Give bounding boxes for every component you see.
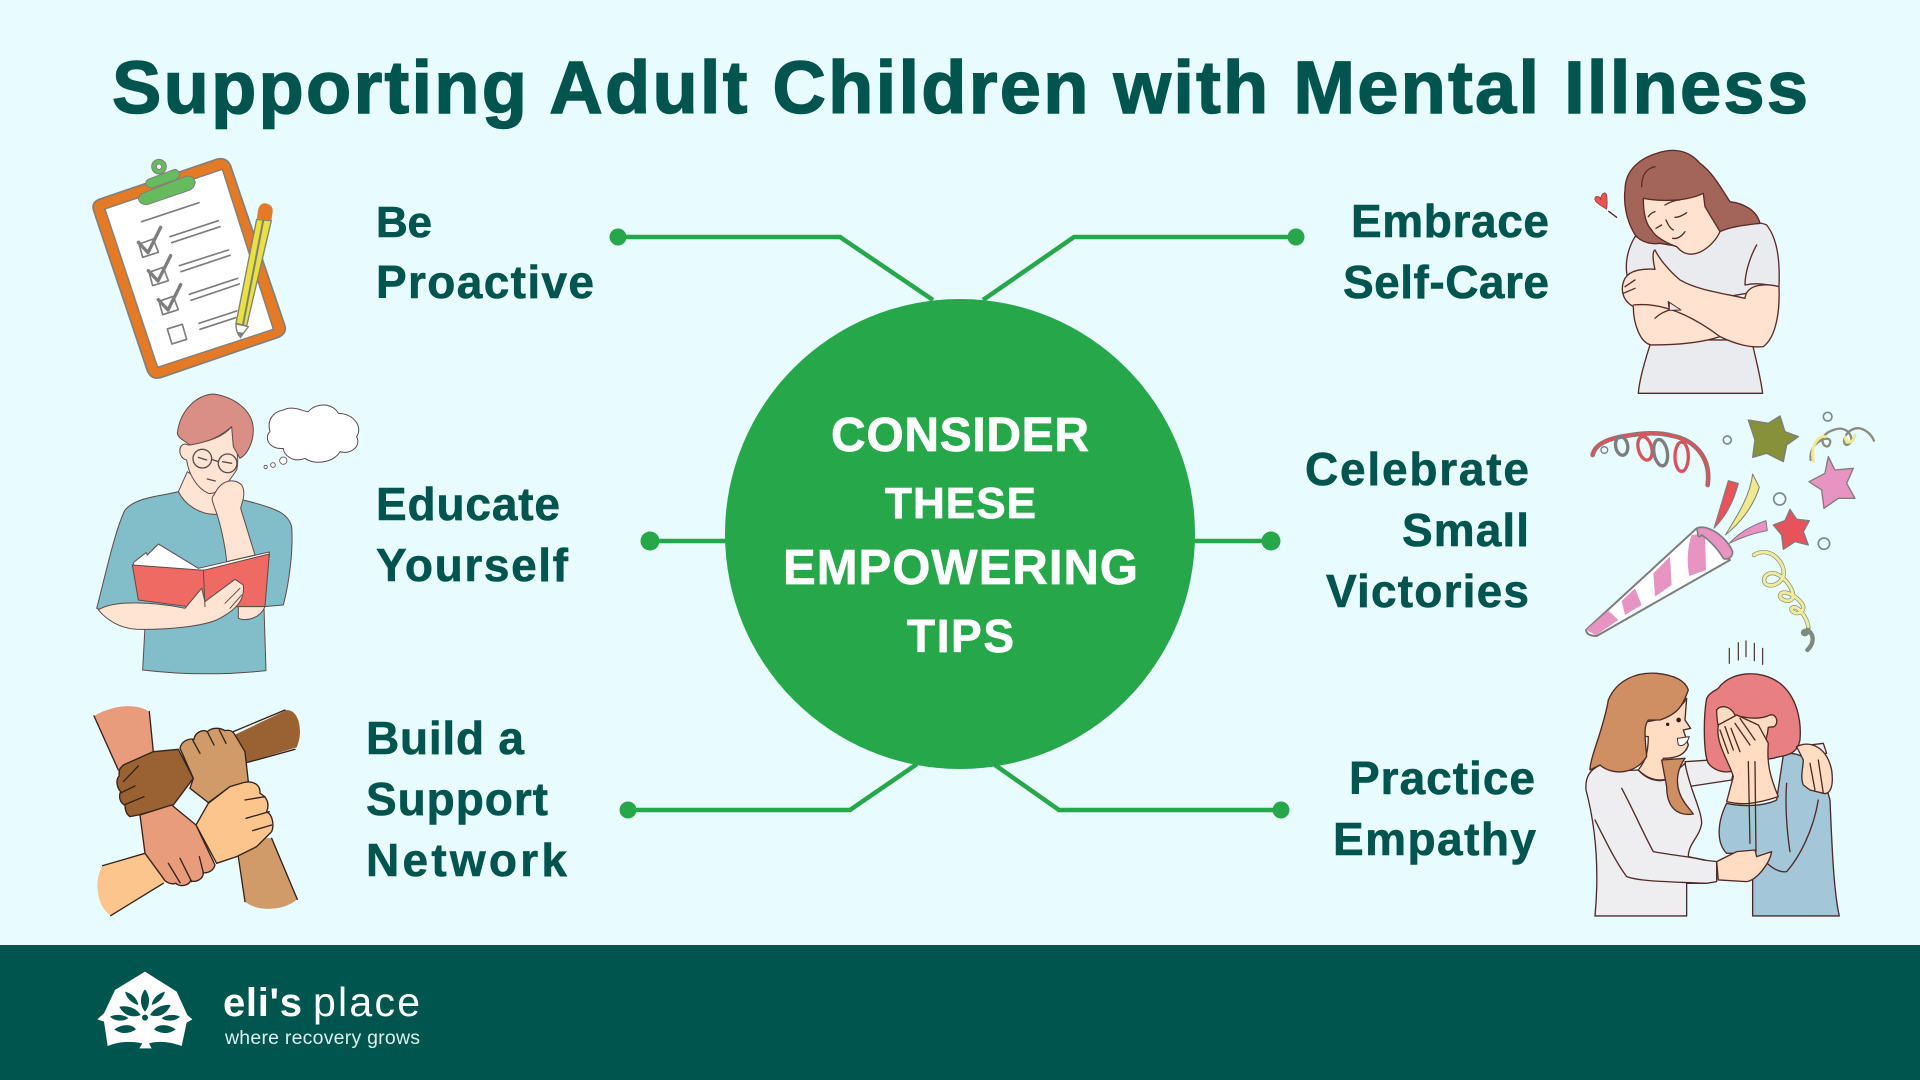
tagline: where recovery grows [224, 1027, 420, 1049]
central circle: TIPS [907, 610, 1014, 662]
tip: Celebrate Small Victories: Celebrate [1305, 443, 1529, 495]
icon: party popper with streamers and stars [1586, 412, 1874, 650]
hands over face [1718, 715, 1778, 804]
central circle: CONSIDER [831, 409, 1089, 462]
tip: Be Proactive [376, 198, 594, 308]
tan hand [180, 728, 248, 803]
tip: Embrace Self-Care [1343, 195, 1549, 308]
tip: Embrace Self-Care: Self-Care [1343, 256, 1549, 308]
arms crossed [1622, 250, 1779, 347]
book pages [133, 544, 269, 573]
red star [1773, 509, 1809, 549]
shirt upper [1626, 223, 1779, 307]
tip: Celebrate Small Victories [1305, 443, 1529, 617]
central circle: EMPOWERING [783, 541, 1138, 595]
tip: Build a Support Network: Support [366, 773, 548, 825]
pale hand [196, 782, 273, 863]
thought bubble [267, 405, 359, 462]
face [1643, 193, 1720, 254]
wordmark: eli's [223, 981, 302, 1025]
icon: woman comforting crying friend [1586, 641, 1839, 916]
shirt lower [1638, 340, 1763, 393]
crying woman face [1717, 707, 1777, 762]
dark brown hand [117, 749, 193, 817]
heart [1595, 193, 1607, 209]
tip: Educate Yourself [376, 478, 569, 591]
hair [1625, 150, 1760, 247]
central circle: THESE [885, 479, 1036, 528]
tip: Build a Support Network [366, 712, 567, 886]
friend features [1676, 718, 1681, 722]
tip: Practice Empathy: Practice [1349, 752, 1535, 804]
tip: Practice Empathy: Empathy [1333, 813, 1536, 865]
tip: Practice Empathy [1333, 752, 1536, 865]
icon: four linked hands [94, 706, 300, 916]
distress marks [1729, 641, 1763, 664]
salmon hand [140, 805, 215, 886]
icon: man reading a book and thinking [97, 394, 359, 674]
title: Supporting Adult Children with Mental Illness [112, 46, 1808, 129]
tip: Celebrate Small Victories: Small [1402, 504, 1529, 556]
neck [178, 472, 223, 514]
friend hand on shoulder [1797, 744, 1832, 794]
raised arm [212, 481, 255, 562]
friend hair [1590, 673, 1688, 772]
tip: Build a Support Network: Network [366, 834, 567, 886]
tip: Celebrate Small Victories: Victories [1326, 565, 1529, 617]
tip: Be Proactive: Be [376, 198, 432, 247]
friend face [1638, 698, 1691, 780]
pink star [1809, 457, 1855, 508]
crying woman hair [1704, 674, 1800, 772]
book cover [132, 554, 269, 608]
tip: Embrace Self-Care: Embrace [1351, 195, 1549, 247]
shirt [97, 492, 292, 674]
tip: Build a Support Network: Build a [366, 712, 524, 764]
connector lines [610, 228, 1304, 818]
crying woman body [1719, 753, 1839, 916]
icon: woman hugging herself [1595, 150, 1779, 393]
friend hand at waist [1717, 850, 1772, 882]
tip: Educate Yourself: Yourself [376, 539, 569, 591]
confetti rings [1723, 412, 1832, 549]
logo: eli's place: place [313, 979, 420, 1025]
logo icon: tree in house [97, 972, 192, 1048]
friend arm across shoulders [1685, 758, 1737, 787]
popper cone [1586, 528, 1730, 636]
yellow streamer top right [1810, 428, 1874, 460]
forearm and hand [98, 579, 244, 629]
footer band [0, 945, 1920, 1080]
hair [177, 394, 253, 458]
tip: Educate Yourself: Educate [376, 478, 560, 530]
glasses [193, 449, 237, 481]
friend shirt [1586, 763, 1717, 916]
green star [1748, 416, 1798, 462]
yellow spiral streamer [1754, 552, 1813, 650]
ribbons [1714, 481, 1738, 528]
face [180, 427, 238, 493]
red streamer [1593, 433, 1708, 485]
icon: clipboard with pencil [93, 159, 285, 378]
logo: eli's place [97, 972, 420, 1049]
tip: Be Proactive: Proactive [376, 256, 594, 308]
central circle [725, 299, 1195, 769]
